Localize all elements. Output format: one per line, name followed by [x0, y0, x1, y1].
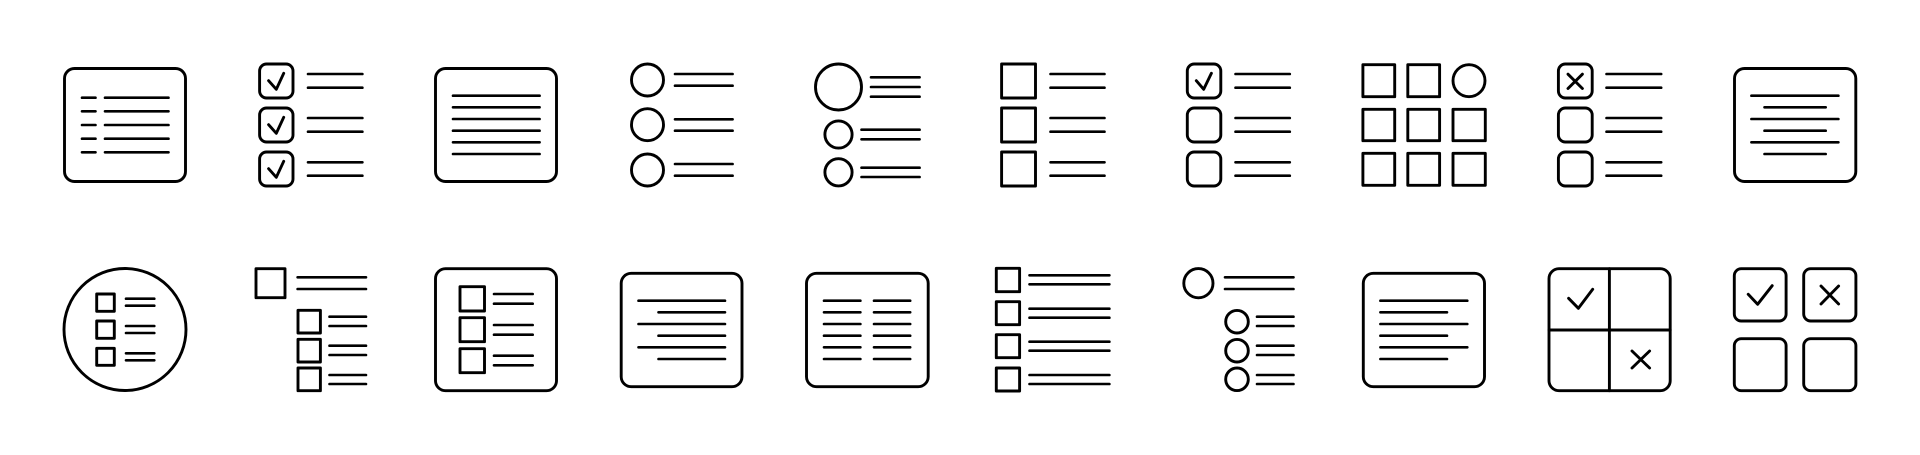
icon: document with two text columns — [806, 273, 928, 387]
cross mark — [1568, 74, 1582, 88]
text lines — [1606, 74, 1661, 176]
circles — [632, 64, 664, 96]
text lines — [453, 96, 540, 154]
circles — [1184, 269, 1213, 298]
frame — [436, 269, 556, 391]
check mark — [1748, 286, 1772, 304]
squares — [97, 294, 114, 311]
icon: grid of eight squares and one circle — [1363, 65, 1485, 185]
frame — [806, 273, 928, 387]
icon: one checked box and two empty boxes with lines — [1187, 64, 1290, 186]
icon: three square boxes with lines — [1002, 64, 1104, 186]
frame — [436, 68, 556, 182]
frame — [1549, 269, 1670, 391]
icon: one crossed box and two empty boxes with lines — [1558, 64, 1661, 186]
icon: nested square checklist — [256, 269, 366, 391]
text lines — [1380, 301, 1467, 359]
text lines — [675, 74, 733, 176]
squares — [1363, 65, 1485, 185]
text lines — [126, 299, 154, 360]
text lines — [1050, 74, 1104, 176]
icon: large circle and two small circles with lines — [816, 64, 920, 186]
checkboxes — [260, 64, 293, 98]
cross mark — [1821, 286, 1839, 304]
circle frame — [64, 268, 186, 390]
text lines — [1236, 74, 1290, 176]
icon: three checked boxes with lines — [260, 64, 362, 186]
text lines — [1225, 277, 1294, 384]
icon: document with centered text lines — [1734, 68, 1856, 182]
squares — [256, 269, 285, 298]
squares — [460, 287, 484, 311]
squares — [996, 268, 1020, 292]
frame — [1363, 273, 1484, 387]
text lines — [824, 301, 910, 359]
frame — [621, 273, 742, 387]
dividers — [1549, 269, 1670, 391]
circle — [1453, 65, 1485, 97]
checkboxes — [1558, 64, 1592, 98]
circles — [816, 64, 862, 110]
text lines — [1030, 275, 1109, 384]
check mark — [1569, 289, 1593, 308]
boxes — [1734, 269, 1786, 321]
icon: document with dashed bullet list — [64, 68, 186, 182]
squares — [1002, 64, 1036, 98]
text lines — [862, 77, 920, 177]
icon: document with left-aligned text lines — [1363, 273, 1484, 387]
frame — [1734, 68, 1856, 182]
icon: nested circle list — [1184, 269, 1294, 391]
text lines — [638, 301, 725, 359]
checkboxes — [1187, 64, 1221, 98]
check marks — [269, 73, 284, 177]
cross mark — [1632, 351, 1650, 368]
icon: document with full text lines — [436, 68, 556, 182]
icon: framed square checklist — [436, 269, 556, 391]
icon: four-cell grid with check and cross — [1549, 269, 1670, 391]
text lines — [298, 277, 366, 384]
text lines — [494, 294, 533, 365]
icon: document with right-aligned text lines — [621, 273, 742, 387]
bullet text lines — [82, 98, 168, 152]
text lines — [1751, 96, 1838, 154]
icon: circle with checklist — [64, 268, 186, 390]
text lines — [308, 74, 362, 176]
frame — [64, 68, 186, 182]
icon: three circles with lines — [632, 64, 733, 186]
check mark — [1196, 73, 1211, 89]
icon: four boxes with check and cross — [1734, 269, 1856, 391]
icon: four square boxes with lines — [996, 268, 1109, 391]
